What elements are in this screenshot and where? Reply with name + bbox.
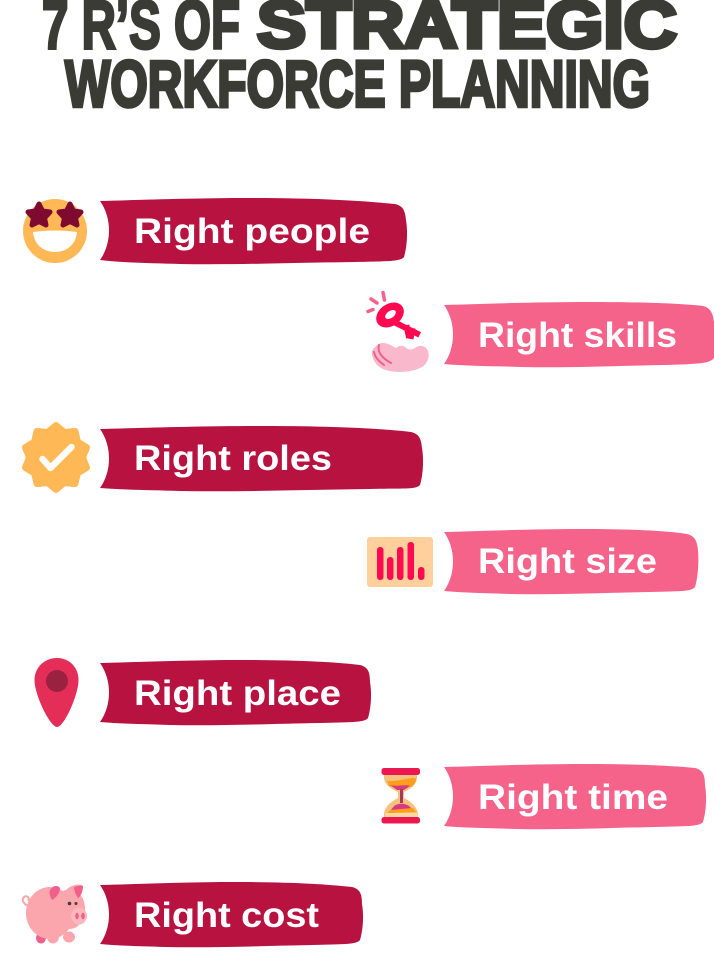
icon: key and hand <box>368 292 429 372</box>
banner: right people: Right people <box>134 212 370 251</box>
icon: map pin <box>34 658 78 727</box>
banner: right place: Right place <box>134 674 341 713</box>
banner: right size: Right size <box>478 542 657 581</box>
icon: star-eyed smiley <box>23 199 87 263</box>
icon: hourglass <box>382 768 420 824</box>
banner: right skills: Right skills <box>478 316 677 355</box>
banner: right time <box>444 764 706 829</box>
banner: right time: Right time <box>478 778 668 817</box>
icon: bar chart <box>367 537 433 587</box>
banner: right place <box>100 660 371 725</box>
icon: check badge <box>26 426 86 490</box>
banner: right cost: Right cost <box>134 896 319 935</box>
banner: right people <box>100 198 407 264</box>
banner: right roles: Right roles <box>134 439 332 478</box>
banner: right roles <box>100 426 423 491</box>
icon: piggy bank <box>23 885 87 944</box>
banner: right skills <box>444 302 714 367</box>
banner: right cost <box>100 882 363 947</box>
banner: right size <box>444 529 698 594</box>
title <box>42 0 677 120</box>
